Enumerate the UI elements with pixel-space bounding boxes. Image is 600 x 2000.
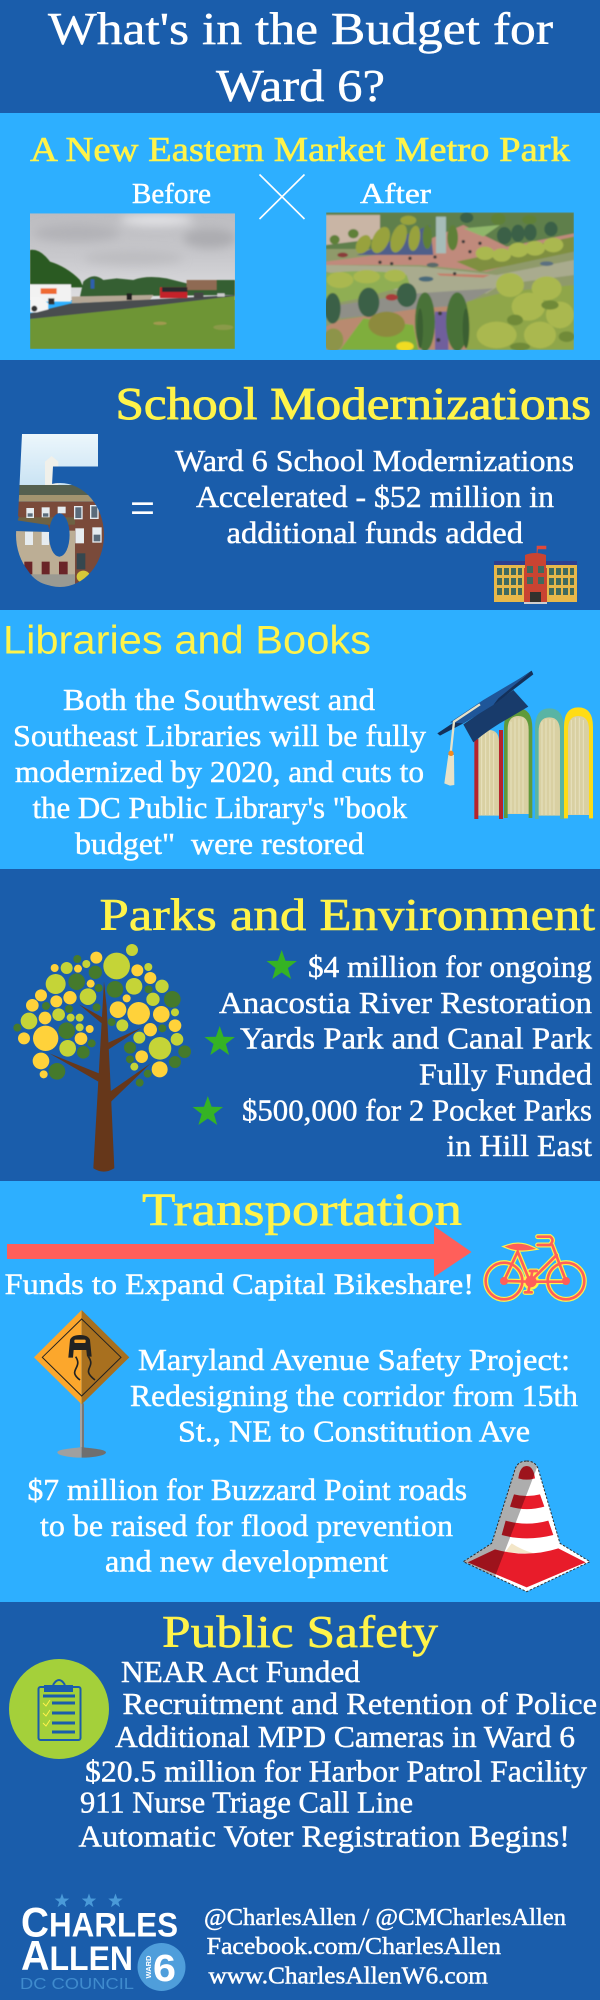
heading: transportation: Transportation (142, 1184, 462, 1236)
logo: Charles Allen: 6 (153, 1948, 176, 1990)
text: school funds: additional funds added (226, 515, 524, 550)
text: libraries: Southeast Libraries will be fully (13, 718, 427, 753)
text: Maryland Avenue (130, 1342, 579, 1449)
text: libraries: Both the Southwest and (63, 682, 376, 717)
text: public safety list: NEAR Act Funded (121, 1654, 361, 1689)
heading: libraries: Libraries and Books (3, 618, 371, 662)
text: public safety list (78, 1654, 597, 1854)
logo: Charles Allen: DC COUNCIL (20, 1976, 134, 1993)
text: parks funding (219, 949, 593, 1163)
icon: traffic cone (463, 1460, 590, 1592)
photo: after (323, 212, 575, 352)
text: public safety list: Automatic Voter Registration Begins! (78, 1819, 570, 1854)
icon: cross (260, 174, 304, 219)
text: public safety list: 911 Nurse Triage Call Line (80, 1785, 413, 1820)
text: libraries: the DC Public Library's "book (32, 790, 407, 825)
numeral five filled with a school photo (16, 434, 104, 587)
title (48, 3, 553, 111)
text: libraries: modernized by 2020, and cuts to (15, 754, 424, 789)
icon: tree (13, 944, 191, 1172)
text: bikeshare: Funds to Expand Capital Bikeshare! (5, 1268, 474, 1301)
text: parks funding: in Hill East (446, 1128, 592, 1163)
icon: star (266, 950, 297, 979)
panel: header (0, 0, 600, 113)
logo: Charles Allen: ALLEN (21, 1932, 133, 1979)
text: Maryland Avenue: Maryland Avenue Safety Project: (138, 1342, 570, 1377)
text: public safety list: Recruitment and Retention of Police (122, 1686, 597, 1721)
icon: school building (494, 546, 577, 604)
text: school funds: Accelerated - $52 million in (196, 479, 555, 514)
heading: schools: School Modernizations (116, 378, 591, 429)
text: parks funding: Yards Park and Canal Park (240, 1020, 593, 1056)
title: What's in the Budget for (48, 3, 553, 54)
photo: before (30, 213, 237, 349)
icon: star (204, 1026, 235, 1055)
label: after: After (360, 179, 432, 210)
text: libraries (13, 682, 427, 861)
panel: school modernizations (16, 386, 590, 604)
panel: parks and environment (0, 869, 600, 1181)
panel: Eastern Market Metro Park (0, 113, 600, 360)
equals sign: = (130, 487, 155, 528)
text: Maryland Avenue: Redesigning the corridor from 15th (130, 1378, 579, 1413)
icon: slippery road sign (34, 1310, 129, 1458)
label: before: Before (132, 179, 211, 210)
panel: libraries and books (0, 610, 600, 869)
text: libraries: budget" were restored (75, 826, 365, 861)
logo: Charles Allen: CHARLES (21, 1899, 178, 1946)
text: public safety list: $20.5 million for Harbor Patrol Facility (85, 1754, 588, 1789)
text: contact links (204, 1905, 566, 1989)
text: school funds: Ward 6 School Modernizations (175, 443, 574, 478)
text: parks funding: $500,000 for 2 Pocket Parks (242, 1092, 592, 1128)
title: Ward 6? (216, 60, 385, 111)
text: parks funding: Fully Funded (419, 1056, 593, 1092)
icon: graduation cap and books (437, 671, 593, 819)
logo: Charles Allen (20, 1894, 186, 1993)
text: Buzzard Point: and new development (105, 1544, 388, 1579)
text: Buzzard Point: to be raised for flood prevention (40, 1508, 454, 1543)
text: Maryland Avenue: St., NE to Constitution Ave (178, 1414, 530, 1449)
panel: public safety (0, 1602, 600, 2000)
heading: park: A New Eastern Market Metro Park (30, 130, 571, 169)
logo: Charles Allen: WARD (144, 1955, 153, 1978)
text: parks funding: Anacostia River Restoration (219, 985, 593, 1020)
icon: clipboard (9, 1659, 109, 1759)
text: contact links: @CharlesAllen / @CMCharlesAllen (204, 1905, 566, 1931)
text: Buzzard Point (28, 1472, 467, 1579)
text: parks funding: $4 million for ongoing (308, 949, 592, 984)
icon: star (193, 1096, 223, 1125)
heading: public safety: Public Safety (162, 1606, 438, 1657)
text: contact links: www.CharlesAllenW6.com (208, 1963, 488, 1989)
panel: transportation (0, 1181, 600, 1602)
text: school funds (175, 443, 574, 550)
arrow (7, 1226, 472, 1277)
heading: parks: Parks and Environment (100, 889, 595, 940)
text: contact links: Facebook.com/CharlesAllen (207, 1934, 501, 1960)
icon: bicycle (486, 1237, 584, 1299)
text: public safety list: Additional MPD Cameras in Ward 6 (115, 1719, 575, 1754)
text: Buzzard Point: $7 million for Buzzard Point roads (28, 1472, 467, 1507)
